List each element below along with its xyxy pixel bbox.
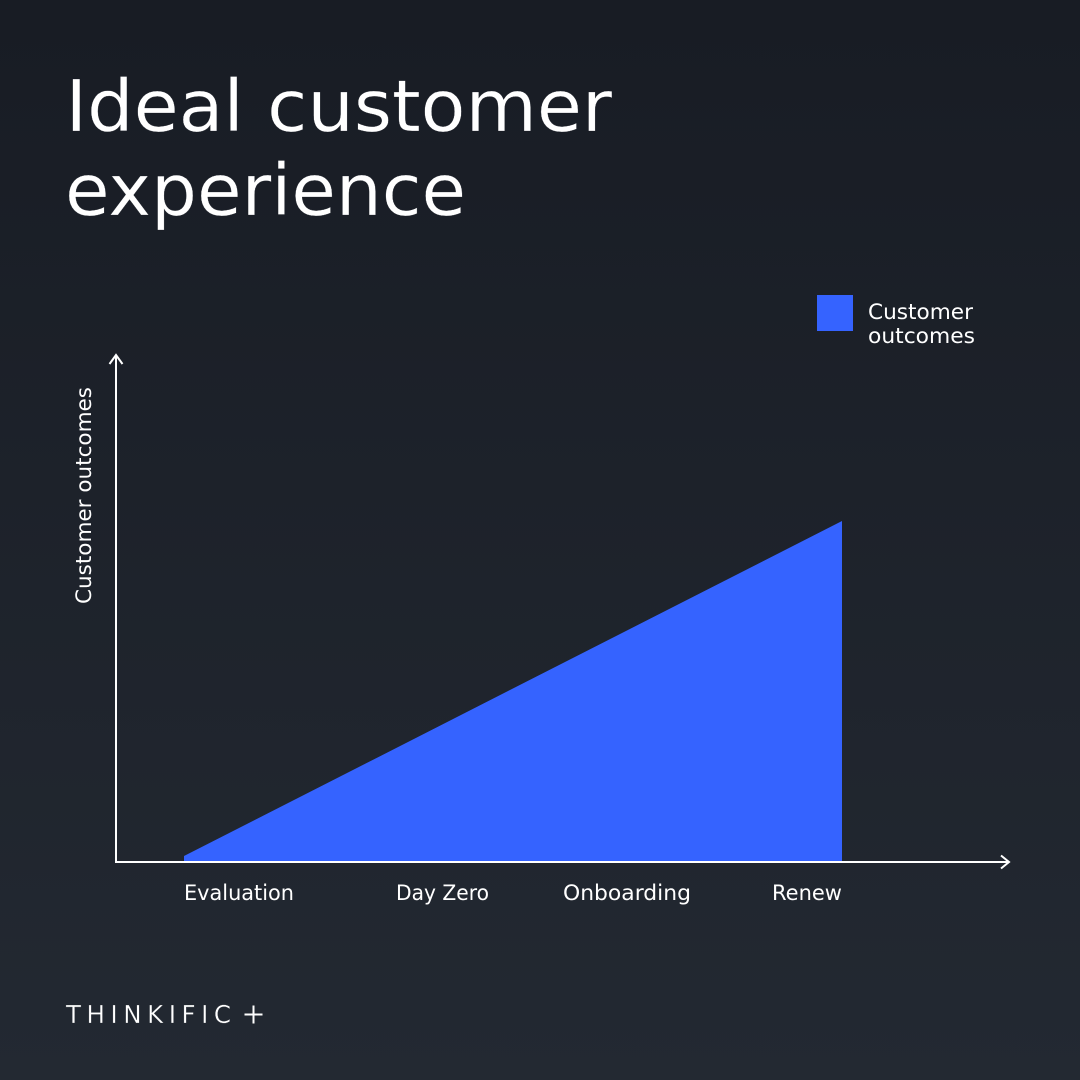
legend label [868,300,975,349]
title: experience [65,149,466,232]
title [65,65,613,232]
logo wordmark: THINKIFIC [65,1000,231,1029]
x axis arrow [115,856,1009,868]
legend swatch [817,295,853,331]
blue area: customer outcomes [184,521,842,861]
area chart [72,355,1009,905]
label: Renew: Renew [772,881,842,905]
logo plus [244,1006,262,1024]
legend label: outcomes [868,324,975,349]
label: Day Zero: Day Zero [396,881,489,905]
logo: Thinkific + [65,1000,262,1029]
label: Onboarding: Onboarding [563,881,691,905]
label: Evaluation: Evaluation [184,881,294,905]
title: Ideal customer [66,65,613,148]
y axis label: Customer outcomes [72,387,97,604]
y axis arrow [110,355,122,862]
legend [817,295,975,349]
legend label: Customer [868,300,973,325]
